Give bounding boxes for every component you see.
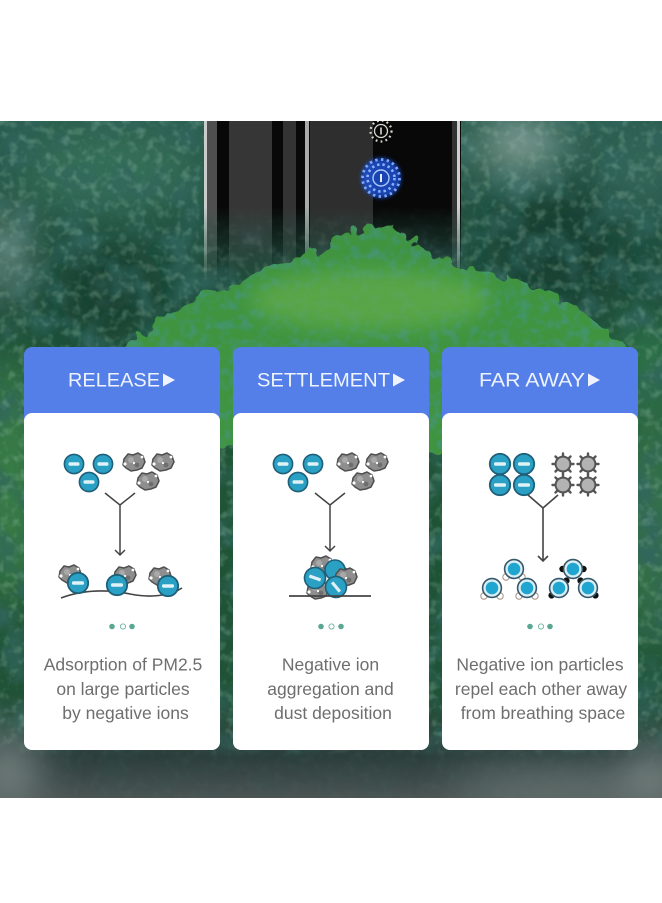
settlement description: aggregation and [267,679,394,699]
release arrow diagram [105,493,135,555]
panel: release [24,347,220,750]
release arrow [163,374,175,386]
far away description: from breathing space [461,703,625,723]
release card body [24,413,220,750]
far away repelling ions left group [481,560,538,599]
settlement arrow diagram [315,493,345,551]
release description: on large particles [56,679,190,699]
release header [24,347,220,427]
release title: RELEASE [68,370,160,392]
panel: far away [442,347,638,750]
settlement description: Negative ion [282,654,379,674]
icon: blue power indicator [361,158,401,198]
panel: settlement [233,347,429,750]
settlement header [233,347,429,427]
settlement title: SETTLEMENT [257,370,390,392]
settlement aggregation cluster [289,556,371,602]
release pager dots [109,624,135,629]
settlement pager dots [318,624,344,629]
settlement ions [273,454,323,492]
tower device [204,121,461,278]
release ions [64,454,113,492]
settlement dust [337,453,388,490]
green bush in front of the device [125,224,625,450]
settlement arrow [393,374,405,386]
far away particles [552,454,598,496]
release description: by negative ions [62,703,189,723]
release description: Adsorption of PM2.5 [44,654,202,674]
icon: white power indicator [370,120,392,142]
far away arrow [588,374,600,386]
far away title: FAR AWAY [479,370,585,392]
far away arrow diagram [528,495,558,561]
forest background photo [0,120,662,805]
far away card body [442,413,638,750]
settlement card body [233,413,429,750]
far away ions [490,454,534,495]
release adsorption result [59,565,182,598]
far away pager dots [527,624,553,629]
far away description: repel each other away [455,679,627,699]
far away repelling ions right group [543,560,604,604]
release dust [123,453,174,490]
far away description: Negative ion particles [456,654,624,674]
far away header [442,347,638,427]
settlement description: dust deposition [274,703,392,723]
